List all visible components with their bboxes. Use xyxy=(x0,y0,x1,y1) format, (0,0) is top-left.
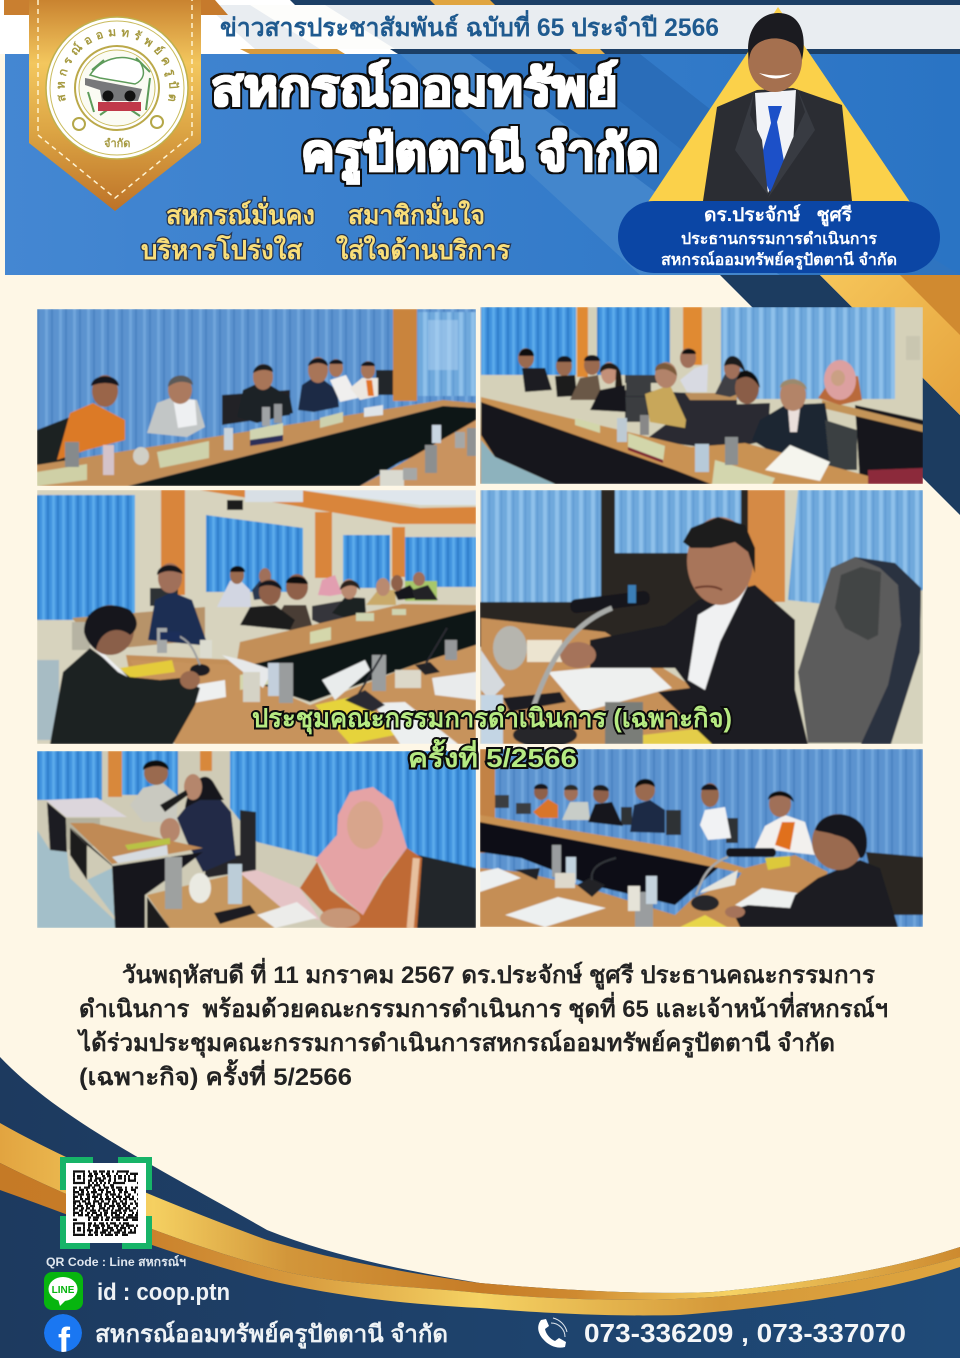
title xyxy=(211,60,659,184)
facebook name: สหกรณ์ออมทรัพย์ครูปัตตานี จำกัด xyxy=(95,1320,448,1349)
logo xyxy=(45,16,189,160)
footer gold band upper xyxy=(0,1123,960,1300)
photo 3: wide meeting room xyxy=(37,490,476,744)
phone numbers: 073-336209 , 073-337070 xyxy=(584,1318,906,1348)
announcement body text: ได้ร่วมประชุมคณะกรรมการดำเนินการสหกรณ์ออมทรัพย์ครูปัตตานี จำกัด xyxy=(76,1028,835,1059)
icon: LINE xyxy=(44,1272,83,1310)
icon: facebook xyxy=(44,1314,82,1352)
slogans: สหกรณ์มั่นคง xyxy=(166,196,315,230)
top stripe band xyxy=(0,0,960,54)
icon: phone xyxy=(538,1318,567,1348)
logo: จำกัด xyxy=(104,137,130,150)
meeting caption xyxy=(252,703,732,773)
slogans: สมาชิกมั่นใจ xyxy=(348,196,485,230)
title: สหกรณ์ออมทรัพย์ xyxy=(211,60,618,116)
meeting caption: ครั้งที่ 5/2566 xyxy=(408,738,577,773)
president name pill: ประธานกรรมการดำเนินการ xyxy=(681,230,877,248)
QR caption: QR Code : Line สหกรณ์ฯ xyxy=(46,1255,186,1269)
QR code xyxy=(60,1157,152,1249)
slogans: บริหารโปร่งใส xyxy=(141,234,302,265)
newsletter issue heading: ข่าวสารประชาสัมพันธ์ ฉบับที่ 65 ประจำปี 2566 xyxy=(220,10,719,42)
LINE id: id : coop.ptn xyxy=(97,1279,230,1306)
photo 6: chairman with board xyxy=(480,749,923,927)
photo 4: chairman speaking xyxy=(480,490,923,747)
president name pill: สหกรณ์ออมทรัพย์ครูปัตตานี จำกัด xyxy=(661,250,897,271)
footer navy swoosh xyxy=(0,1057,960,1358)
meeting caption: ประชุมคณะกรรมการดำเนินการ (เฉพาะกิจ) xyxy=(252,703,732,735)
president name pill xyxy=(618,201,940,273)
corner shapes top right xyxy=(720,275,960,515)
announcement body text: (เฉพาะกิจ) ครั้งที่ 5/2566 xyxy=(79,1058,352,1091)
photo 2: members at table xyxy=(480,307,923,484)
icon: LINE: LINE xyxy=(52,1285,75,1296)
announcement body text: วันพฤหัสบดี ที่ 11 มกราคม 2567 ดร.ประจักษ์ ชูศรี ประธานคณะกรรมการ xyxy=(122,957,875,990)
slogans: ใส่ใจด้านบริการ xyxy=(336,235,510,265)
ribbon badge xyxy=(29,0,201,211)
announcement body text xyxy=(76,957,888,1091)
header blue panel xyxy=(5,54,960,275)
ribbon tabs xyxy=(4,0,228,15)
announcement body text: ดำเนินการ พร้อมด้วยคณะกรรมการดำเนินการ ชุดที่ 65 และเจ้าหน้าที่สหกรณ์ฯ xyxy=(79,991,888,1025)
president portrait xyxy=(648,7,910,202)
slogans xyxy=(141,196,510,265)
photo 5: woman in hijab xyxy=(37,751,476,928)
footer gold band lower xyxy=(0,1163,960,1315)
photo 1: directors at table xyxy=(37,309,476,486)
title: ครูปัตตานี จำกัด xyxy=(301,125,659,184)
president name pill: ดร.ประจักษ์ ชูศรี xyxy=(704,204,853,227)
